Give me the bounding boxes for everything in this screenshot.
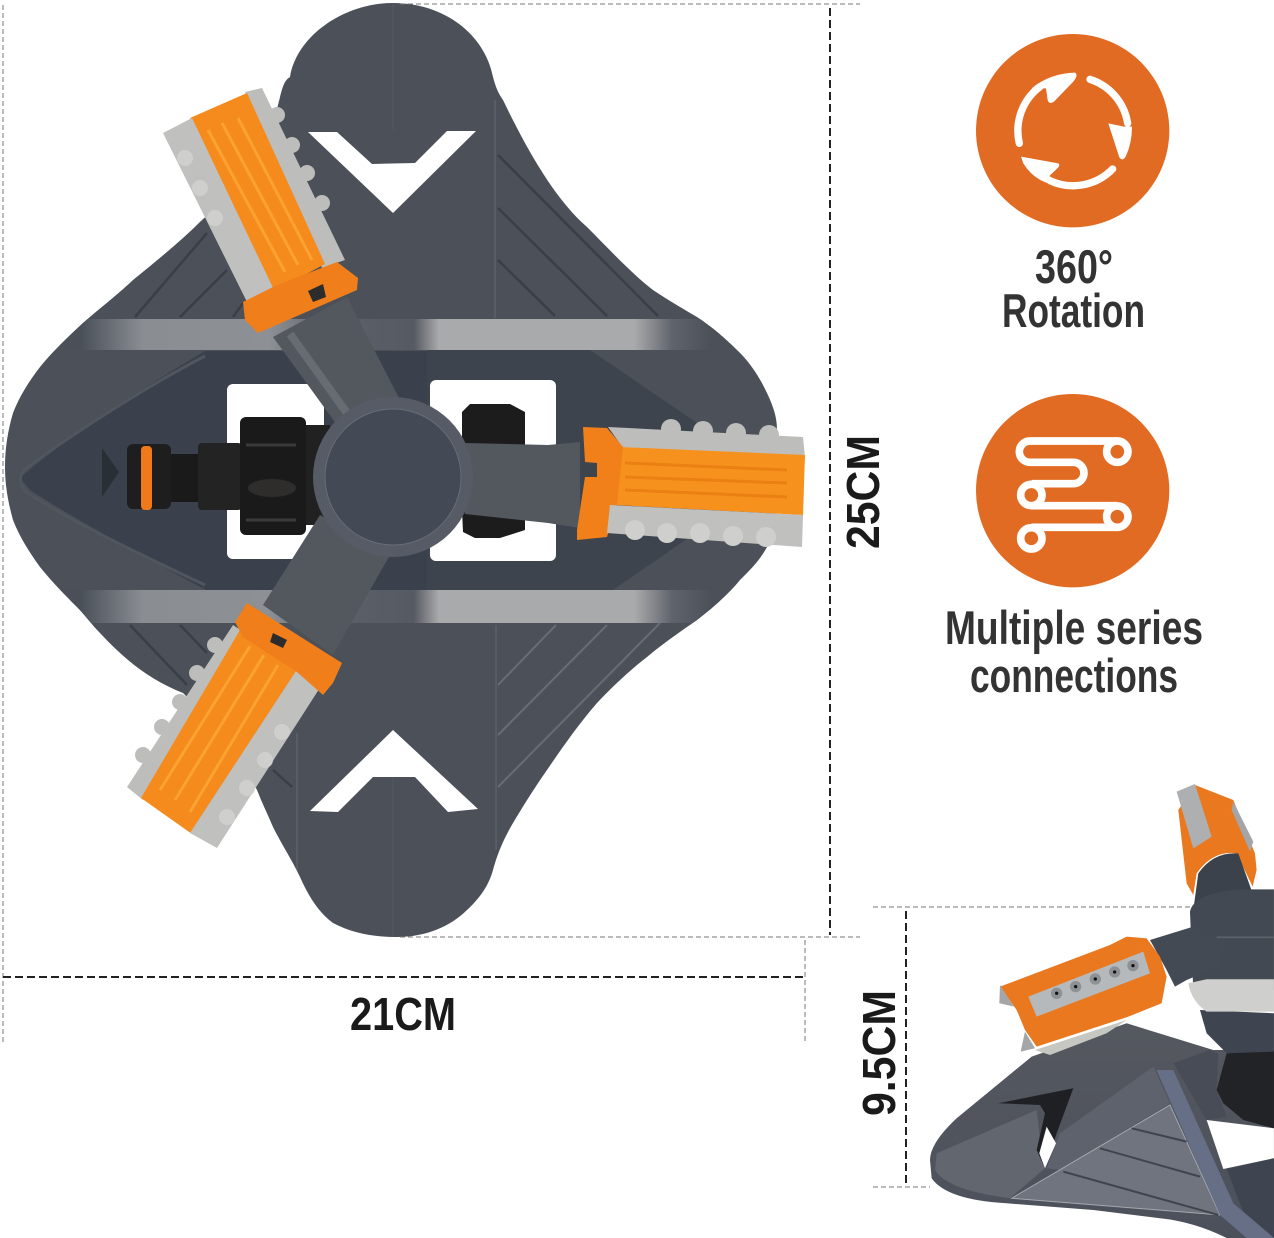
heading: 360 rotation [1002,240,1145,337]
right arm [465,419,805,547]
side view left panel [935,1110,1045,1198]
side view connector [1217,1050,1274,1128]
label: 25CM: 25CM [837,435,889,549]
upper arm pipe [273,297,400,425]
right arm collar [577,427,623,540]
centre hub [313,397,473,557]
right arm lower strip [607,505,803,547]
side view slate block [1173,1050,1227,1120]
label: 9.5CM: 9.5CM [853,990,905,1116]
heading: multiple series connections [945,601,1203,702]
left tip crease [20,356,205,585]
main sprinkler top view [5,3,805,937]
hose connector [102,417,330,535]
side view lower body [1200,1010,1274,1053]
horizontal ridge bands [60,319,720,623]
dark rear base [1227,1158,1274,1238]
right arm top strip [608,419,805,458]
side view white ring [1188,979,1274,1012]
top chevron cut-out [308,131,476,213]
label: 21CM: 21CM [350,988,456,1040]
dimension lines: main view [3,4,860,1042]
icon: multiple series connections [976,394,1169,587]
lower arm [127,515,390,848]
side view slot [998,1088,1073,1168]
upper arm left strip [163,118,275,308]
upper arm collar [243,262,358,333]
small sprinkler side view [930,784,1274,1238]
icon: 360 rotation [976,34,1169,227]
side view base [930,1023,1274,1238]
side view near pipe [1150,927,1218,987]
side view near arm head [999,937,1167,1055]
upper arm body [190,93,325,292]
right arm body [615,447,805,515]
side view hub [1190,889,1274,990]
right arm pipe [465,442,580,528]
heading: 360 rotation: Rotation [1002,284,1145,337]
left window [227,384,324,559]
bottom chevron cut-out [310,730,478,812]
side view triangle panel [1012,1105,1220,1215]
lower arm collar [235,603,342,695]
upper arm right strip [245,88,345,268]
lower arm left strip [127,625,245,800]
dark left recess [20,351,430,592]
upper arm [163,88,400,425]
side view upper slope [1047,1067,1170,1170]
lower arm pipe [263,515,390,655]
lower arm right strip [190,671,323,848]
right window [430,380,556,561]
dark right recess [427,350,700,592]
base plate [5,3,780,937]
white gap under hub [1207,1120,1274,1169]
hatch panels [129,100,660,870]
heading: multiple series connections: connections [970,649,1178,702]
rear connector [462,404,525,538]
lower arm body [141,630,299,834]
dimension lines: side view [873,907,1190,1187]
heading: multiple series connections: Multiple series [945,601,1203,654]
side view far arm [1177,784,1257,910]
blue ridge [1157,1070,1274,1238]
heading: 360 rotation: 360° [1035,240,1113,293]
